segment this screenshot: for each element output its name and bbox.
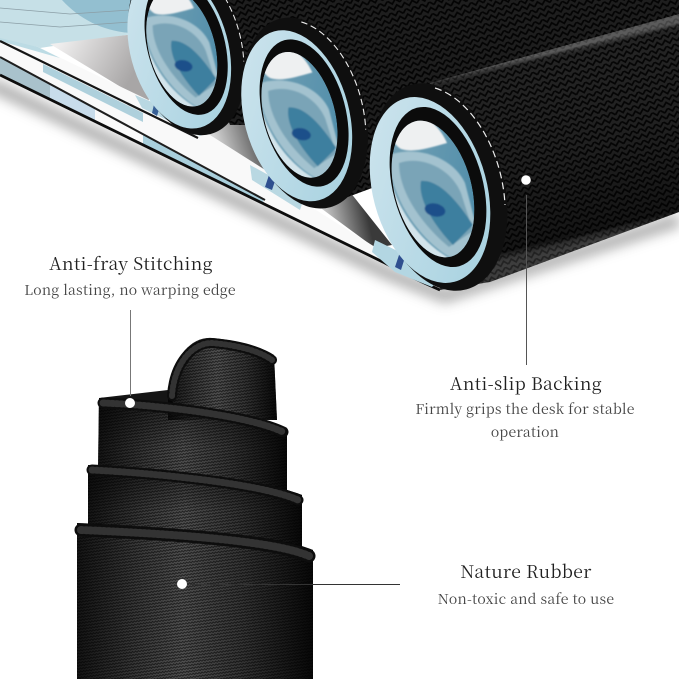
text: anti-slip backing: operation (491, 422, 559, 442)
text: anti-fray stitching: Long lasting, no warping edge (24, 280, 236, 300)
text: anti-slip backing: Firmly grips the desk for stable (415, 399, 635, 419)
text: anti-slip backing (415, 371, 635, 442)
mat layers (0, 38, 440, 291)
mat surface print (0, 0, 140, 48)
mat shadow (0, 84, 679, 296)
roll body 1 and 2 background (190, 0, 679, 198)
callout: anti-slip backing pointer (521, 175, 531, 365)
text: anti-slip backing: Anti-slip Backing (450, 371, 602, 396)
text: anti-fray stitching (24, 251, 236, 300)
layer: second wrap (88, 465, 302, 550)
roll 3 body (430, 14, 679, 290)
layer: top flap (168, 338, 277, 420)
text: nature rubber: Non-toxic and safe to use (438, 589, 614, 609)
text: nature rubber: Nature Rubber (460, 559, 592, 584)
layer: third wrap (77, 523, 313, 679)
text: anti-fray stitching: Anti-fray Stitching (49, 251, 213, 276)
cylinder shading (168, 338, 277, 420)
roll 3 end face (349, 68, 529, 306)
panel: rolled mat product top (0, 0, 679, 306)
stitched edges (81, 343, 309, 556)
roll 2 end face (222, 3, 388, 223)
layer: first wrap (98, 398, 287, 490)
callout: nature rubber pointer (177, 579, 400, 589)
floor shadow under rolls (50, 34, 200, 135)
roll 1 end face (109, 0, 265, 149)
blue stripe marks (152, 100, 161, 116)
callout: anti-fray stitching pointer (125, 310, 135, 408)
panel: rolled black rubber mat (77, 338, 313, 679)
text: nature rubber (438, 559, 614, 609)
mat print accent (62, 0, 140, 33)
